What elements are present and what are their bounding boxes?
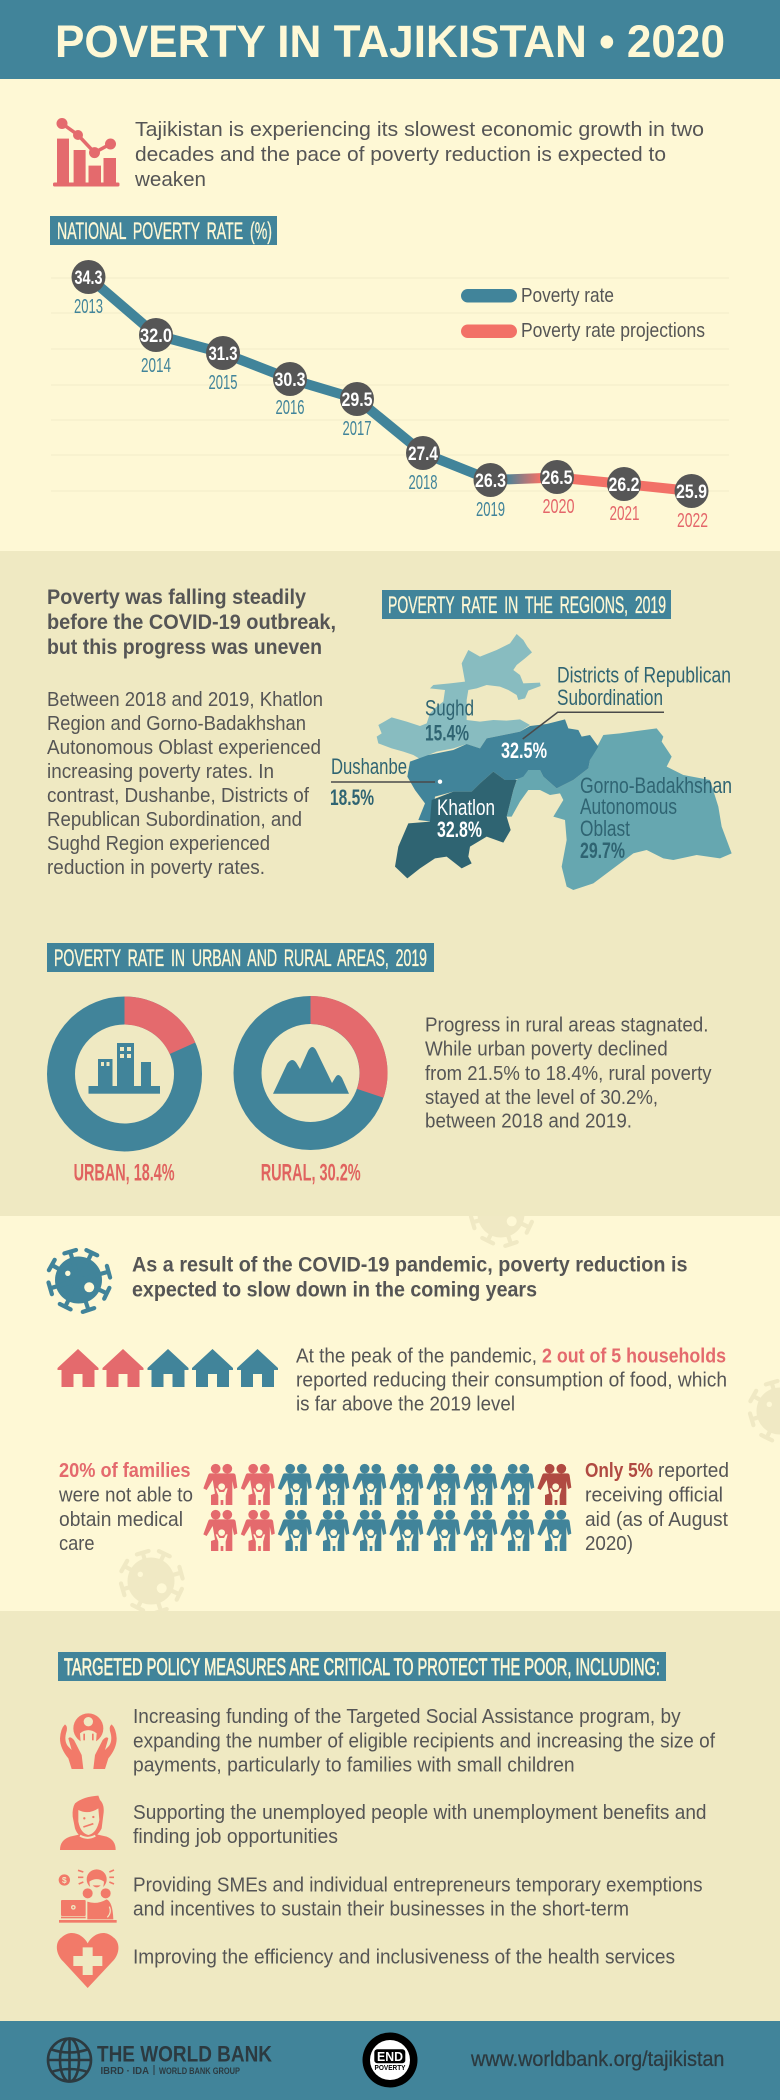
text: medical care: care xyxy=(59,1532,94,1555)
text: rural progress: between 2018 and 2019. xyxy=(425,1110,632,1133)
text: targeted social assistance: Increasing funding of the Targeted Social Assistance program, by xyxy=(133,1705,681,1728)
line chart: national poverty rate: 34.3 xyxy=(74,268,102,289)
text: official aid: 2020) xyxy=(585,1532,633,1555)
map: Tajikistan regions: Oblast xyxy=(580,816,630,841)
pictogram: families xyxy=(203,1464,571,1551)
map: Tajikistan regions: 32.8% xyxy=(437,817,482,842)
line chart: national poverty rate: 2019 xyxy=(476,499,505,521)
heading: pandemic: expected to slow down in the coming years xyxy=(132,1279,537,1302)
intro text: weaken xyxy=(134,168,206,191)
icon: mountains xyxy=(273,1047,349,1094)
line chart: national poverty rate: 2013 xyxy=(74,296,103,318)
map region: Gorno-Badakhshan xyxy=(507,728,732,890)
panel: header xyxy=(0,0,780,79)
panel: national poverty rate xyxy=(0,79,780,551)
chart legend xyxy=(461,284,705,342)
text: regional explanation: Sughd Region experienced xyxy=(47,832,270,855)
map: Tajikistan regions: 18.5% xyxy=(330,785,374,810)
text: rural progress: from 21.5% to 18.4%, rural poverty xyxy=(425,1062,712,1085)
icon: virus xyxy=(48,1250,110,1312)
text: medical care: obtain medical xyxy=(59,1508,183,1531)
line chart: national poverty rate: 2015 xyxy=(208,372,238,394)
text: regional explanation: Republican Subordination, and xyxy=(47,808,302,831)
label: urban: URBAN, 18.4% xyxy=(74,1160,175,1187)
chart legend: Poverty rate projections xyxy=(521,319,705,342)
map: Tajikistan regions: Sughd xyxy=(425,696,474,721)
map: Tajikistan regions xyxy=(330,634,732,890)
map: Tajikistan regions: Districts of Republican xyxy=(557,663,731,688)
line chart: national poverty rate: 25.9 xyxy=(676,482,707,503)
line chart: national poverty rate: 2016 xyxy=(276,397,304,419)
text: SME exemptions: Providing SMEs and individual entrepreneurs temporary exemptions xyxy=(133,1874,702,1897)
intro text xyxy=(134,118,704,191)
heading: national poverty rate xyxy=(50,216,277,245)
icon: declining bar chart xyxy=(53,118,120,186)
line chart: national poverty rate: 2017 xyxy=(342,418,372,440)
panel: policy measures xyxy=(0,1611,780,2021)
text: official aid: aid (as of August xyxy=(585,1508,728,1531)
heading: pandemic: As a result of the COVID-19 pandemic, poverty reduction is xyxy=(132,1254,688,1277)
panel: regions and urban rural xyxy=(0,551,780,1216)
text: households: reported reducing their consumption of food, which xyxy=(296,1369,727,1392)
text: rural progress xyxy=(425,1014,712,1133)
donut chart: urban xyxy=(61,996,195,1187)
map: Tajikistan regions: Khatlon xyxy=(437,795,495,820)
text: health services: Improving the efficiency and inclusiveness of the health services xyxy=(133,1945,675,1968)
text: households: 2 out of 5 households xyxy=(542,1345,726,1368)
text: targeted social assistance: expanding the number of eligible recipients and increasing the size of xyxy=(133,1730,715,1753)
text: official aid: Only 5% xyxy=(585,1459,653,1482)
heading: regions xyxy=(382,590,671,619)
map region: Khatlon xyxy=(395,772,517,878)
map: Tajikistan regions: 29.7% xyxy=(580,838,625,863)
text: unemployed support xyxy=(133,1801,706,1848)
text: households: is far above the 2019 level xyxy=(296,1393,515,1416)
icon: heart with cross xyxy=(57,1933,118,1988)
line chart: national poverty rate: 31.3 xyxy=(208,344,238,365)
title: POVERTY IN TAJIKISTAN • 2020 xyxy=(55,16,725,67)
text: website: www.worldbank.org/tajikistan xyxy=(470,2048,724,2071)
label: rural: RURAL, 30.2% xyxy=(261,1160,361,1187)
line chart: national poverty rate xyxy=(51,260,729,532)
intro text: Tajikistan is experiencing its slowest economic growth in two xyxy=(135,118,704,141)
donut chart: rural xyxy=(248,996,388,1187)
text: SME exemptions xyxy=(133,1874,702,1921)
map: Tajikistan regions: Dushanbe xyxy=(331,754,407,779)
text: rural progress: stayed at the level of 30.2%, xyxy=(425,1086,658,1109)
logo: End Poverty: END xyxy=(377,2050,403,2064)
text: official aid xyxy=(585,1459,729,1555)
icon: city xyxy=(88,1043,160,1094)
text: targeted social assistance xyxy=(133,1705,715,1777)
logo: World Bank xyxy=(48,2038,272,2082)
text: rural progress: Progress in rural areas stagnated. xyxy=(425,1014,708,1037)
text: SME exemptions: and incentives to sustain their businesses in the short-term xyxy=(133,1898,629,1921)
text: regional explanation: Between 2018 and 2019, Khatlon xyxy=(47,688,323,711)
text: regional explanation: Autonomous Oblast experienced xyxy=(47,736,321,759)
heading: urban and rural xyxy=(47,943,434,972)
line chart: national poverty rate: 29.5 xyxy=(342,390,373,411)
heading: pandemic xyxy=(132,1254,688,1302)
map region: Sughd xyxy=(377,634,541,760)
logo: End Poverty: POVERTY xyxy=(374,2065,406,2072)
map: Tajikistan regions: 15.4% xyxy=(425,721,469,746)
text: unemployed support: finding job opportunities xyxy=(133,1825,338,1848)
map: Tajikistan regions: Gorno-Badakhshan xyxy=(580,773,732,798)
map: Tajikistan regions: Autonomous xyxy=(580,794,677,819)
panel: footer xyxy=(0,2021,780,2100)
line chart: national poverty rate: 26.5 xyxy=(542,468,573,489)
line chart: national poverty rate: 2021 xyxy=(610,503,640,525)
text: households xyxy=(296,1345,727,1416)
logo: World Bank: THE WORLD BANK xyxy=(97,2042,272,2067)
text: households: At the peak of the pandemic, xyxy=(296,1345,537,1368)
heading: poverty was falling: Poverty was falling steadily xyxy=(47,586,306,609)
text: medical care: were not able to xyxy=(58,1484,193,1507)
chart legend: Poverty rate xyxy=(521,284,614,307)
icon: entrepreneur with laptop: $ xyxy=(62,1875,67,1885)
logo: World Bank: WORLD BANK GROUP xyxy=(159,2066,240,2076)
text: medical care xyxy=(58,1459,193,1555)
text: regional explanation: Region and Gorno-Badakhshan xyxy=(47,712,306,735)
text: medical care: 20% of families xyxy=(59,1459,190,1482)
line chart: national poverty rate: 32.0 xyxy=(140,326,172,347)
panel: COVID-19 impact xyxy=(46,1216,780,1611)
text: regional explanation: contrast, Dushanbe, Districts of xyxy=(47,784,309,807)
heading: poverty was falling xyxy=(47,586,336,659)
map region: Districts of Republican Subordination xyxy=(407,719,598,822)
logo: End Poverty xyxy=(362,2032,418,2088)
text: regional explanation: reduction in poverty rates. xyxy=(47,856,265,879)
line chart: national poverty rate: 26.2 xyxy=(608,475,640,496)
text: regional explanation xyxy=(47,688,323,879)
line chart: national poverty rate: 30.3 xyxy=(274,370,306,391)
line chart: national poverty rate: 2020 xyxy=(542,496,574,518)
line chart: national poverty rate: 2022 xyxy=(677,510,708,532)
text: official aid: reported xyxy=(658,1459,729,1482)
text: unemployed support: Supporting the unemployed people with unemployment benefits and xyxy=(133,1801,706,1824)
heading: urban and rural: POVERTY RATE IN URBAN AND RURAL AREAS, 2019 xyxy=(54,945,427,972)
text: regional explanation: increasing poverty rates. In xyxy=(47,760,274,783)
heading: poverty was falling: before the COVID-19 outbreak, xyxy=(47,611,336,634)
text: official aid: receiving official xyxy=(585,1484,723,1507)
heading: national poverty rate: NATIONAL POVERTY RATE (%) xyxy=(57,218,272,245)
line chart: national poverty rate: 2018 xyxy=(408,472,438,494)
intro text: decades and the pace of poverty reduction is expected to xyxy=(135,143,666,166)
logo: World Bank: IBRD · IDA xyxy=(100,2066,149,2077)
text: targeted social assistance: payments, particularly to families with small children xyxy=(133,1754,575,1777)
map: Tajikistan regions: Subordination xyxy=(557,685,663,710)
icon: unemployed person xyxy=(60,1796,116,1850)
map: Tajikistan regions: 32.5% xyxy=(501,738,547,763)
icon: entrepreneur with laptop xyxy=(59,1869,117,1923)
line chart: national poverty rate: 27.4 xyxy=(408,444,438,465)
text: rural progress: While urban poverty declined xyxy=(425,1038,668,1061)
heading: poverty was falling: but this progress was uneven xyxy=(47,636,322,659)
icons: houses xyxy=(58,1349,278,1387)
line chart: national poverty rate: 2014 xyxy=(141,355,171,377)
line chart: national poverty rate: 26.3 xyxy=(475,471,506,492)
icon: hands holding person xyxy=(60,1713,117,1769)
